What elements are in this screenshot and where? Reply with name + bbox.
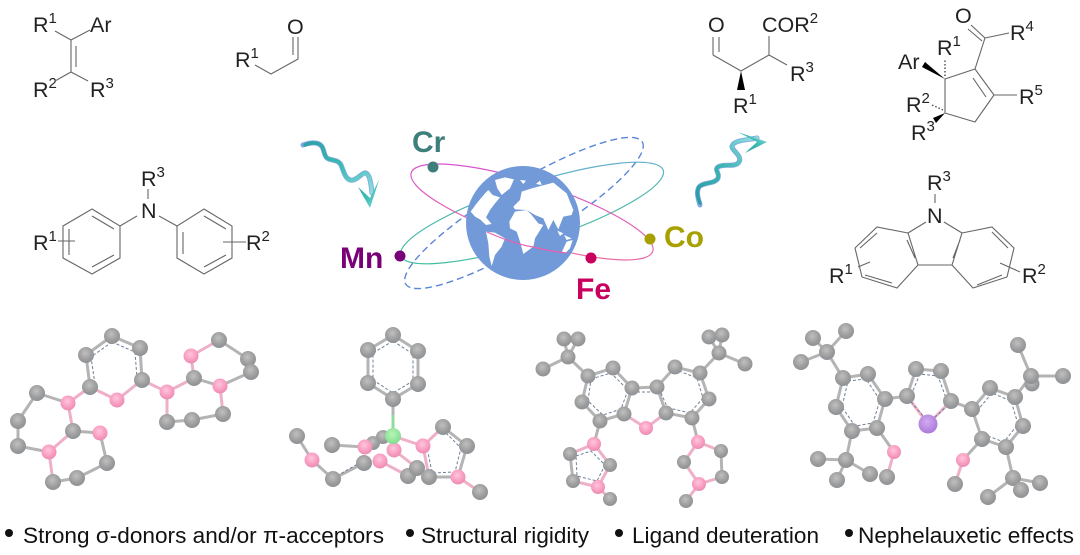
arrow: outgoing wavy arrow — [697, 132, 767, 205]
product: dialdehyde derivative: 2 — [810, 10, 818, 27]
product: cyclopentene: R — [1019, 85, 1035, 109]
metal: Fe — [576, 252, 611, 306]
substrate: alkene: R — [33, 13, 49, 37]
product: carbazole: R — [1022, 264, 1038, 288]
product: carbazole: 2 — [1038, 261, 1046, 278]
feature: ligand deuteration: Ligand deuteration — [632, 523, 819, 548]
substrate: triarylamine: R — [246, 231, 262, 255]
substrate: alkene: R — [33, 78, 49, 102]
metal: Cr: Cr — [412, 126, 446, 159]
substrate: triarylamine: 1 — [49, 228, 57, 245]
product: cyclopentene: 1 — [953, 33, 961, 50]
ligand model 4: tert-butyl aryl thiophene — [793, 323, 1071, 505]
product: dialdehyde derivative: R — [790, 62, 806, 86]
central globe with metal orbits — [340, 116, 704, 310]
orbit: magenta — [402, 145, 662, 279]
substrate: triarylamine: 3 — [157, 164, 165, 181]
globe — [466, 166, 580, 280]
substrate: aldehyde: O — [287, 15, 304, 39]
product: cyclopentene: O — [955, 4, 972, 28]
ligand model 3: dibenzofuran — [536, 328, 752, 508]
product: dialdehyde derivative: O — [708, 13, 725, 37]
product: cyclopentene: 3 — [927, 118, 935, 135]
substrate: triarylamine: R — [33, 231, 49, 255]
substrate: alkene: R — [90, 78, 106, 102]
orbit: dashed blue — [390, 116, 658, 310]
orbit: teal — [392, 143, 672, 283]
product: cyclopentene: R — [1010, 21, 1026, 45]
arrow: incoming wavy arrow — [303, 143, 379, 208]
substrate: triarylamine: N — [141, 199, 157, 223]
substrate: triarylamine — [33, 164, 270, 274]
substrate: alkene: Ar — [90, 13, 112, 37]
feature: nephelauxetic effects: Nephelauxetic effects — [858, 523, 1074, 548]
product: dialdehyde derivative: 1 — [749, 91, 757, 108]
product: carbazole: 1 — [845, 261, 853, 278]
product: carbazole: R — [829, 264, 845, 288]
ligand model 1: terpyridine-like — [10, 328, 259, 490]
product: dialdehyde derivative: 3 — [806, 59, 814, 76]
product: carbazole: 3 — [943, 168, 951, 185]
feature: strong donors and acceptors: Strong σ-donors and/or π-acceptors — [23, 523, 384, 548]
feature: structural rigidity: Structural rigidity — [421, 523, 589, 548]
metal: Mn: Mn — [340, 242, 383, 275]
metal: Co — [644, 221, 704, 254]
product: cyclopentene: R — [937, 36, 953, 60]
metal: Fe: Fe — [576, 273, 611, 306]
substrate: alkene: 1 — [49, 10, 57, 27]
substrate: alkene: 2 — [49, 75, 57, 92]
product: carbazole — [829, 168, 1046, 288]
substrate: triarylamine: 2 — [262, 228, 270, 245]
feature list — [5, 523, 1074, 548]
product: cyclopentene: R — [906, 93, 922, 117]
product: cyclopentene: Ar — [898, 50, 920, 74]
substrate: alkene — [33, 10, 114, 102]
ligand model 2: phenyl borate — [289, 327, 488, 500]
product: cyclopentene: 4 — [1026, 18, 1034, 35]
metal: Co: Co — [664, 221, 704, 254]
product: dialdehyde derivative: COR — [762, 13, 810, 37]
substrate: aldehyde: 1 — [251, 45, 259, 62]
product: cyclopentene: 5 — [1035, 82, 1043, 99]
product: dialdehyde derivative: R — [733, 94, 749, 118]
substrate: alkene: 3 — [106, 75, 114, 92]
substrate: aldehyde: R — [235, 48, 251, 72]
product: cyclopentene: 2 — [922, 90, 930, 107]
substrate: aldehyde — [235, 15, 304, 74]
product: cyclopentene: R — [911, 121, 927, 145]
substrate: triarylamine: R — [141, 167, 157, 191]
metal: Mn — [340, 242, 406, 275]
product: cyclopentene — [898, 4, 1043, 145]
product: dialdehyde derivative — [708, 10, 818, 118]
product: carbazole: R — [927, 171, 943, 195]
product: carbazole: N — [927, 204, 943, 228]
